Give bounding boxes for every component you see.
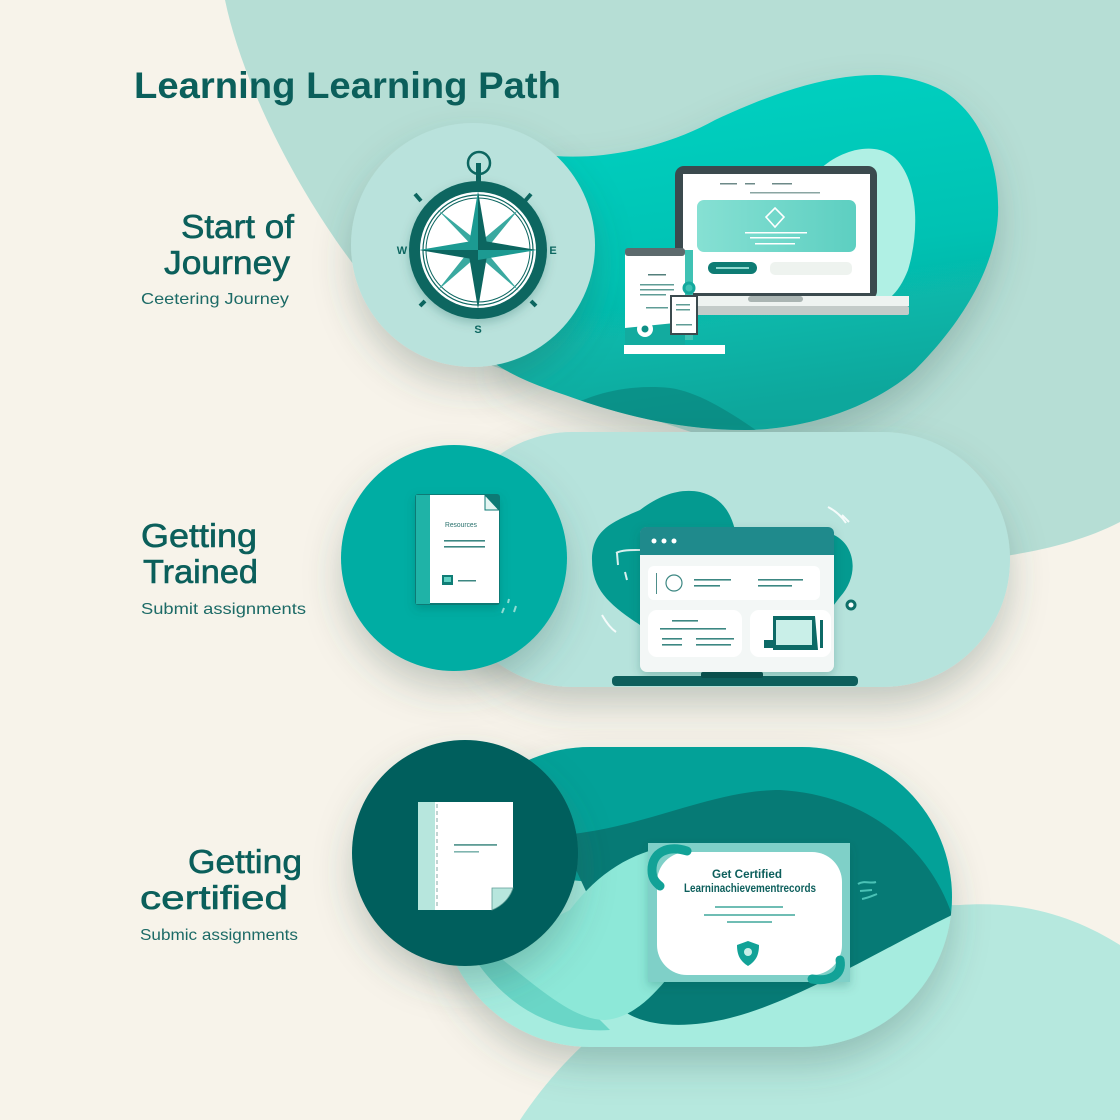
step 2 label: Submit assignments [141,601,306,618]
teal blob [490,75,998,430]
panel: getting trained [341,432,1010,687]
icon: compass: S [474,324,482,336]
step 1 label [141,208,295,308]
step 1 label: Start of [181,208,295,245]
icon: tablet and phone [624,248,725,354]
step 3 label: Submic assignments [140,927,298,944]
background blob: bottom right [520,904,1120,1120]
icon: compass circle [351,123,595,367]
blob lower shading [581,387,756,430]
pale blob behind laptop [800,149,915,305]
icon: circle with document [341,445,567,671]
certificate [648,843,850,982]
pill background [440,747,952,1047]
pill background [445,432,1010,687]
step 2 label [141,517,306,618]
background blob: top right [225,0,1120,556]
step 2 label: Trained [143,553,258,590]
laptop base [612,672,858,686]
layered waves [440,747,952,1030]
teal blob [592,491,853,625]
step 1 label: Journey [164,244,291,281]
icon: dot [847,601,855,609]
swoosh marks [858,882,877,899]
step 2 label: Getting [141,517,257,554]
icon: compass: W [397,245,408,257]
panel: getting certified [352,740,952,1047]
corner flourishes [652,849,687,886]
icon: circle with document: Resources [445,522,477,529]
certificate text: Get Certified [712,867,782,881]
icon: shield [737,941,759,966]
panel: start of journey [351,75,998,440]
icon: laptop [675,166,909,315]
step 3 label: certified [140,879,288,916]
content card left [648,610,742,657]
icon: compass: E [549,245,557,257]
icon: app window [640,527,834,672]
step 3 label [140,843,302,944]
step 3 label: Getting [188,843,302,880]
icon: dark circle with document [352,740,578,966]
content row [648,566,820,600]
icon: compass [397,152,557,336]
step 1 label: Ceetering Journey [141,291,289,308]
certificate: Learninachievementrecords [684,881,816,895]
title: Learning Learning Path [134,65,561,106]
content card right [750,610,831,657]
swoosh marks [602,507,849,632]
